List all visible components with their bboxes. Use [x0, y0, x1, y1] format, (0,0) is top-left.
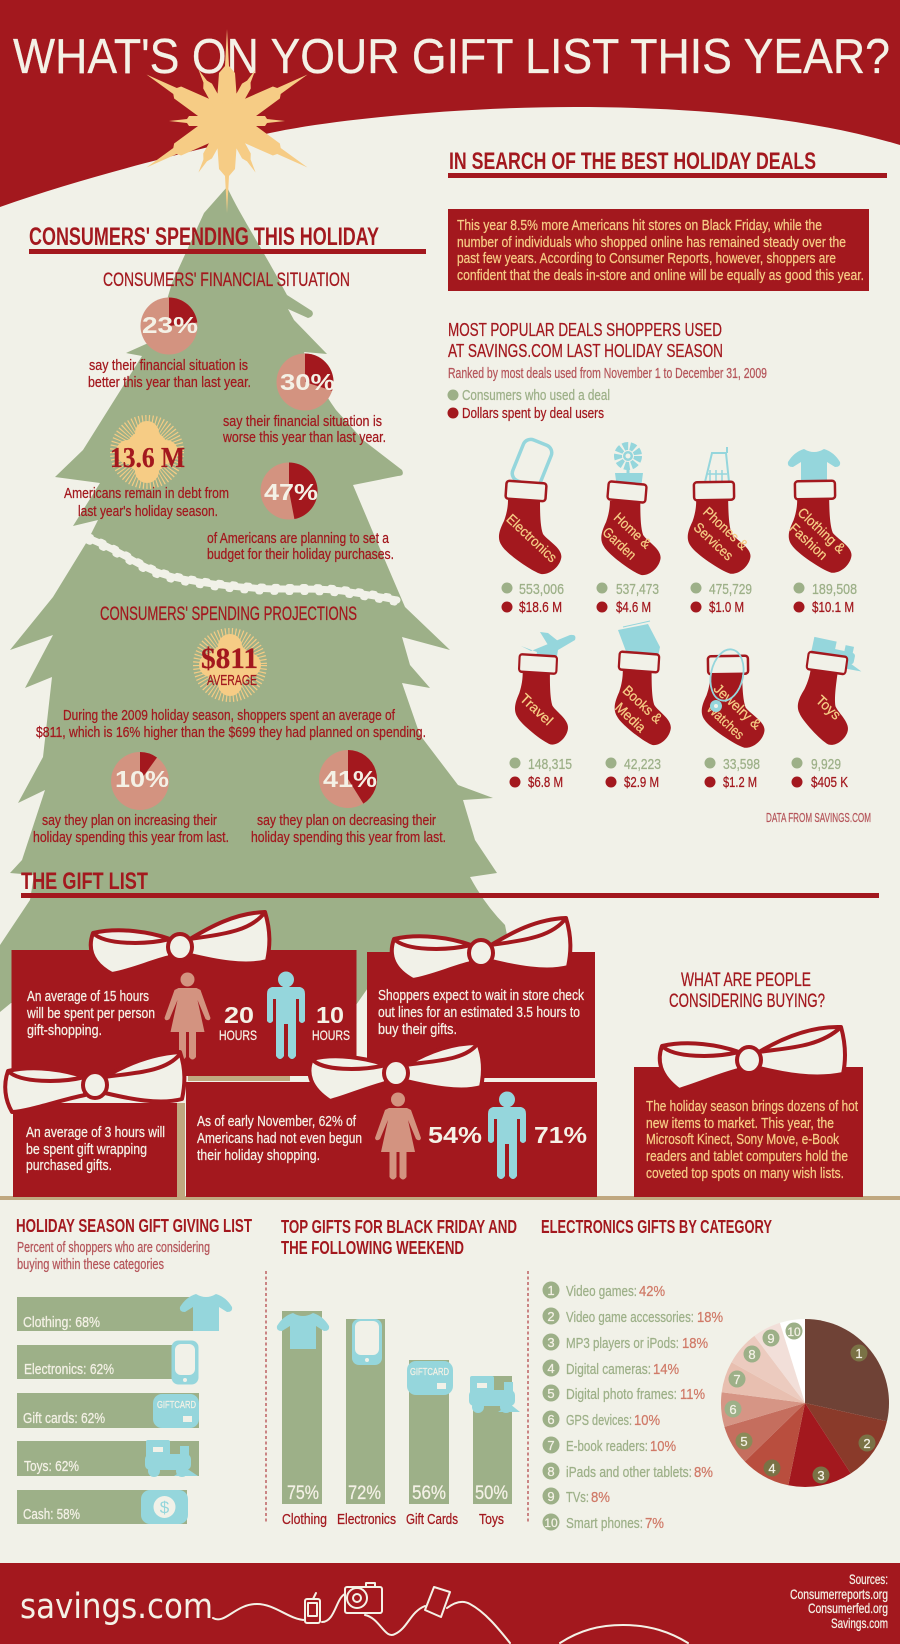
panel: black friday intro: This year 8.5% more Americans hit stores on Black Friday, while the [457, 217, 822, 234]
stocking: travel: Travel [517, 690, 556, 728]
panel: checkout lines: buy their gifts. [378, 1021, 457, 1038]
bar: clothing [17, 1294, 232, 1331]
bar: toys: Toys: 62% [24, 1458, 79, 1475]
stocking: toys [793, 637, 866, 747]
stats: row two: 148,315 [528, 756, 572, 773]
heading: top gifts: TOP GIFTS FOR BLACK FRIDAY AND [281, 1217, 517, 1237]
icon: woman [375, 1092, 421, 1180]
text: budget [207, 530, 394, 563]
pie stat: 47%: 47% [264, 479, 318, 505]
panel: gift-shopping hours: HOURS [312, 1027, 350, 1043]
stats: row one: $4.6 M [616, 599, 651, 616]
panel: gift-shopping hours: 20 [224, 1002, 254, 1028]
heading: what are people considering: CONSIDERING BUYING? [669, 991, 825, 1012]
ground line and posts [0, 1076, 900, 1200]
heading: what are people considering: WHAT ARE PEOPLE [681, 970, 811, 991]
electronics list: 42% [639, 1283, 665, 1300]
text: 2009 holiday season [36, 707, 426, 741]
panel: gift-shopping hours: 10 [316, 1002, 344, 1028]
text: americans in debt: last year's holiday season. [78, 503, 218, 520]
pie stat: 10% [111, 752, 169, 810]
bar: gift cards [17, 1393, 199, 1428]
legend: Dollars spent by deal users [462, 405, 604, 422]
stat: 13.6 M sunburst: 13.6 M [110, 442, 185, 474]
pie stat: 41%: 41% [323, 766, 377, 792]
column: clothing 75% [277, 1311, 329, 1528]
stocking: jewelry and watches [701, 646, 765, 749]
electronics list: 14% [653, 1361, 679, 1378]
panel: gift wrapping [5, 1052, 184, 1197]
text: americans in debt: Americans remain in debt from [64, 485, 229, 502]
panel: not yet begun shopping: their holiday shopping. [197, 1147, 320, 1164]
electronics list: 1 [547, 1283, 555, 1298]
panel: gift wrapping: An average of 3 hours will [26, 1124, 165, 1141]
pie chart: electronics categories: 8 [748, 1347, 756, 1362]
section heading: consumers' spending: CONSUMERS' SPENDING THIS HOLIDAY [29, 223, 379, 251]
pie chart: electronics categories [721, 1319, 889, 1487]
panel: gift-shopping hours: HOURS [219, 1027, 257, 1043]
panel: checkout lines: out lines for an estimated 3.5 hours to [378, 1004, 580, 1021]
electronics list: 6 [547, 1412, 555, 1427]
electronics list [542, 1282, 723, 1532]
panel: gift-shopping hours: An average of 15 hours [27, 988, 149, 1005]
panel: not yet begun shopping [186, 1043, 597, 1197]
panel: hot new items: Microsoft Kinect, Sony Move, e-Book [646, 1131, 839, 1148]
stat: $811 average sunburst: AVERAGE [207, 672, 257, 689]
legend [448, 387, 610, 422]
panel: not yet begun shopping: As of early November, 62% of [197, 1113, 357, 1130]
text: budget: of Americans are planning to set a [207, 530, 390, 547]
subheading: financial situation: CONSUMERS' FINANCIAL SITUATION [103, 270, 350, 291]
text: 2009 holiday season: $811, which is 16% higher than the $699 they had planned on spending. [36, 724, 426, 741]
column: electronics 72%: Electronics [337, 1511, 396, 1528]
stocking: electronics: Electronics [504, 511, 560, 565]
text: 2009 holiday season: During the 2009 holiday season, shoppers spent an average of [63, 707, 396, 724]
icon: bow [5, 1052, 184, 1112]
stats: row one: 475,729 [709, 581, 752, 598]
stocking: clothing and fashion: Fashion [786, 520, 831, 563]
red header swoosh [0, 0, 900, 207]
stats: row one [502, 581, 857, 616]
heading: holiday season gift giving list: HOLIDAY SEASON GIFT GIVING LIST [16, 1216, 252, 1236]
bar: clothing: Clothing: 68% [23, 1314, 100, 1331]
electronics list: 8% [694, 1464, 713, 1481]
stats: row two: $2.9 M [624, 774, 659, 791]
electronics list: 10 [544, 1516, 558, 1530]
electronics list: 5 [547, 1386, 555, 1401]
icon: bow [91, 912, 269, 974]
icon: gold star tree topper [141, 29, 313, 213]
electronics list: E-book readers: [566, 1438, 648, 1455]
icon: bow [309, 1043, 483, 1101]
text: decreasing spending: say they plan on decreasing their [257, 812, 436, 829]
stocking: travel [515, 632, 575, 745]
stocking: books and media: Books & [620, 682, 666, 727]
bar: cash: $ [160, 1498, 170, 1517]
christmas tree [0, 187, 512, 1012]
pie chart: electronics categories: 4 [768, 1461, 776, 1476]
electronics list: MP3 players or iPods: [566, 1335, 679, 1352]
column: toys 50%: Toys [479, 1511, 504, 1528]
pie chart: electronics categories: 6 [729, 1402, 737, 1417]
text: increasing spending [33, 812, 229, 846]
stats: row two: 33,598 [723, 756, 760, 773]
text: worse this year: say their financial situation is [223, 413, 382, 430]
pie stat: 30% [276, 354, 335, 410]
electronics list: 3 [547, 1335, 555, 1350]
sources [790, 1571, 888, 1631]
section heading: the gift list [21, 868, 879, 898]
stocking: phones and services [687, 447, 752, 575]
text: better this year: say their financial situation is [89, 357, 248, 374]
text: increasing spending: holiday spending this year from last. [33, 829, 229, 846]
electronics list: Digital photo frames: [566, 1386, 677, 1403]
panel: not yet begun shopping: 71% [534, 1122, 587, 1148]
pie chart: electronics categories: 9 [767, 1331, 775, 1346]
stocking: clothing and fashion: Clothing & [795, 504, 849, 557]
electronics list: Digital cameras: [566, 1361, 651, 1378]
panel: hot new items: readers and tablet computers hold the [646, 1148, 848, 1165]
text: decreasing spending [251, 812, 446, 846]
stats: row one: 553,006 [519, 581, 564, 598]
column: gift cards 56%: 56% [412, 1483, 446, 1504]
stats: row one: $18.6 M [519, 599, 562, 616]
bar: gift cards: Gift cards: 62% [23, 1410, 105, 1427]
electronics list: 9 [547, 1489, 555, 1504]
panel: black friday intro [448, 209, 869, 291]
column: gift cards 56% [406, 1360, 458, 1528]
stat: $811 average sunburst [199, 634, 261, 696]
electronics list: 7% [645, 1515, 664, 1532]
electronics list: 4 [547, 1361, 555, 1376]
electronics list: 10% [650, 1438, 676, 1455]
bar: gift cards: GIFTCARD [157, 1400, 196, 1411]
panel: checkout lines [367, 918, 595, 1078]
column: gift cards 56%: GIFTCARD [410, 1367, 449, 1378]
stocking: books and media: Media [612, 699, 649, 736]
bar: cash: Cash: 58% [23, 1506, 80, 1523]
text: budget: budget for their holiday purchases. [207, 546, 394, 563]
column: toys 50% [469, 1376, 520, 1528]
divider [266, 1271, 528, 1522]
electronics list: TVs: [566, 1489, 589, 1506]
column: gift cards 56%: Gift Cards [406, 1511, 458, 1528]
panel: hot new items [634, 1027, 863, 1197]
electronics list: Video game accessories: [566, 1309, 694, 1326]
stocking: phones and services: Phones & [700, 504, 752, 553]
subtitle: percent of shoppers [17, 1240, 210, 1273]
text: worse this year [222, 413, 386, 446]
heading: most popular deals: MOST POPULAR DEALS SHOPPERS USED [448, 319, 722, 340]
stats: row one: $1.0 M [709, 599, 744, 616]
pie stat: 30%: 30% [280, 369, 335, 395]
column: electronics 72% [337, 1319, 396, 1528]
electronics list: Video games: [566, 1283, 637, 1300]
stats: row two: $1.2 M [723, 774, 757, 791]
stocking: phones and services: Services [691, 519, 737, 563]
column: electronics 72%: 72% [348, 1483, 381, 1504]
heading: what are people considering [669, 970, 825, 1012]
pie stat: 10%: 10% [115, 766, 169, 792]
column: toys 50%: 50% [475, 1483, 508, 1504]
panel: hot new items: coveted top spots on many wish lists. [646, 1165, 844, 1182]
icon: bow [392, 918, 570, 980]
electronics list: 8 [547, 1464, 555, 1479]
garland [88, 536, 397, 603]
panel: gift-shopping hours: gift-shopping. [27, 1022, 102, 1039]
heading: most popular deals: AT SAVINGS.COM LAST HOLIDAY SEASON [448, 340, 723, 361]
column: clothing 75%: 75% [287, 1483, 319, 1504]
stats: row two: $405 K [811, 774, 848, 791]
pie chart: electronics categories: 7 [733, 1372, 741, 1387]
pie chart: electronics categories: 3 [817, 1468, 825, 1483]
pie stat: 23%: 23% [142, 312, 198, 338]
stocking: books and media [612, 621, 671, 745]
stocking: clothing and fashion [786, 449, 852, 574]
stats: row one: 189,508 [812, 581, 857, 598]
pie stat: 41% [319, 750, 377, 808]
electronics list: Smart phones: [566, 1515, 643, 1532]
stocking: toys: Toys [813, 692, 844, 723]
stats: row one: 537,473 [616, 581, 659, 598]
bar: electronics: Electronics: 62% [24, 1361, 114, 1378]
footer line art: gadgets [213, 1583, 688, 1643]
stocking: jewelry and watches: Watches [704, 700, 748, 742]
footer band [0, 1563, 900, 1644]
text: americans in debt [64, 485, 229, 520]
pie stat: 47% [260, 462, 318, 520]
panel: gift-shopping hours [12, 912, 356, 1076]
pie chart: electronics categories: 5 [740, 1434, 748, 1449]
pie stat: 23% [140, 298, 198, 354]
heading: top gifts: THE FOLLOWING WEEKEND [281, 1238, 464, 1258]
section heading: the gift list: THE GIFT LIST [21, 868, 148, 895]
icon: man [488, 1092, 526, 1179]
heading: most popular deals [448, 319, 723, 361]
stats: row two [510, 756, 848, 791]
electronics list: 8% [591, 1489, 610, 1506]
electronics list: 7 [547, 1438, 555, 1453]
bar: electronics [17, 1340, 198, 1384]
stat: 13.6 M sunburst [110, 421, 185, 483]
electronics list: iPads and other tablets: [566, 1464, 692, 1481]
pie chart: electronics categories: 10 [787, 1325, 801, 1339]
pie chart: electronics categories: 2 [863, 1436, 871, 1451]
icon: woman [164, 972, 210, 1060]
electronics list: 10% [634, 1412, 660, 1429]
bar: cash [17, 1490, 188, 1524]
subtitle: ranking note: Ranked by most deals used from November 1 to December 31, 2009 [448, 366, 767, 382]
electronics list: 11% [680, 1386, 705, 1403]
stats: row two: 9,929 [811, 756, 841, 773]
bar: toys [17, 1440, 199, 1477]
panel: gift-shopping hours: will be spent per person [26, 1005, 155, 1022]
stocking: home and garden [600, 446, 661, 575]
panel: gift wrapping: be spent gift wrapping [26, 1141, 147, 1158]
icon: bow [660, 1027, 845, 1090]
text: better this year: better this year than last year. [88, 374, 251, 391]
heading: top gifts [281, 1217, 517, 1258]
text: worse this year: worse this year than last year. [222, 429, 386, 446]
stats: row two: $6.8 M [528, 774, 563, 791]
stat: $811 average sunburst: $811 [201, 642, 258, 675]
stats: row one: $10.1 M [812, 599, 854, 616]
column: clothing 75%: Clothing [282, 1511, 327, 1528]
heading: electronics gifts: ELECTRONICS GIFTS BY CATEGORY [541, 1217, 772, 1237]
subtitle: percent of shoppers: buying within these categories [17, 1257, 164, 1273]
text: decreasing spending: holiday spending this year from last. [251, 829, 446, 846]
panel: not yet begun shopping: 54% [428, 1122, 482, 1148]
panel: hot new items: new items to market. This year, the [646, 1115, 834, 1132]
stocking: electronics [499, 437, 561, 574]
icon: man [267, 972, 305, 1059]
logo: savings.com: savings.com [20, 1587, 213, 1627]
legend: Consumers who used a deal [462, 387, 610, 404]
text: increasing spending: say they plan on increasing their [42, 812, 217, 829]
subtitle: percent of shoppers: Percent of shoppers who are considering [17, 1240, 210, 1256]
stats: row two: 42,223 [624, 756, 661, 773]
text: better this year [88, 357, 251, 391]
electronics list: 18% [682, 1335, 708, 1352]
panel: gift wrapping: purchased gifts. [26, 1157, 112, 1174]
subheading: spending projections: CONSUMERS' SPENDING PROJECTIONS [100, 604, 357, 625]
stocking: home and garden: Garden [600, 524, 640, 563]
electronics list: 18% [697, 1309, 723, 1326]
stocking: home and garden: Home & [611, 509, 655, 552]
panel: checkout lines: Shoppers expect to wait in store check [378, 987, 584, 1004]
stocking: jewelry and watches: Jewelry & [711, 680, 765, 733]
electronics list: 2 [547, 1309, 555, 1324]
pie chart: electronics categories: 1 [855, 1346, 863, 1361]
panel: not yet begun shopping: Americans had not even begun [197, 1130, 362, 1147]
electronics list: GPS devices: [566, 1412, 632, 1429]
